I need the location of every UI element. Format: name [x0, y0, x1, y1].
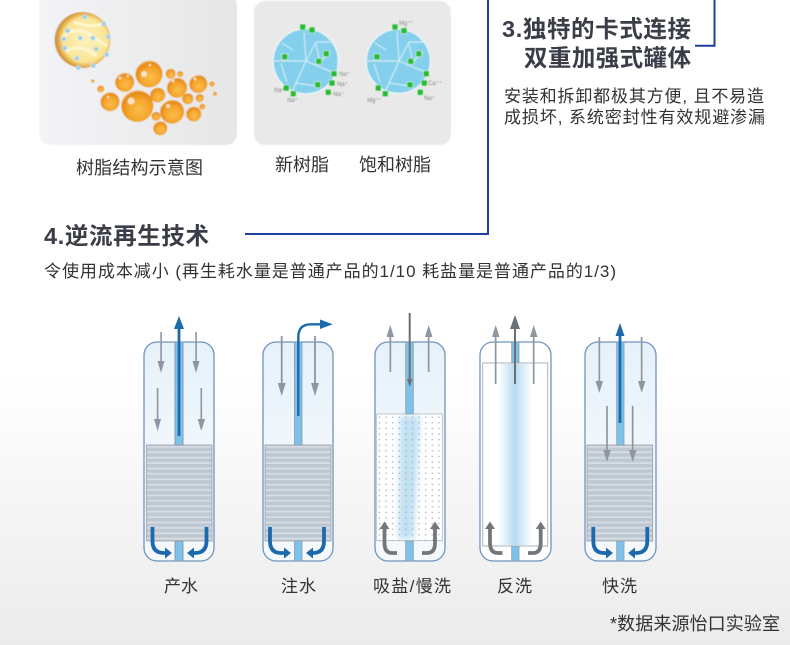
ion labels: Na⁺ [287, 97, 298, 104]
arrows: grey downflow [154, 332, 205, 431]
resin bed [146, 445, 212, 541]
ion labels [274, 71, 350, 104]
ion labels: Na⁺ [337, 81, 348, 88]
connector line: section 3 heading [695, 0, 714, 46]
resin bed [265, 445, 331, 541]
ion labels: Na⁺ [424, 95, 435, 102]
connector line: to section 4 [245, 0, 488, 234]
ion labels: Ca⁺⁺ [428, 80, 442, 87]
text block: section 3 description: 成损坏, 系统密封性有效规避渗漏 [504, 108, 765, 127]
heading: section 3: 3.独特的卡式连接 [502, 16, 691, 42]
text block: section 4 description: 令使用成本减小 (再生耗水量是普通产品的1/10 耗盐量是普通产品的1/3) [44, 261, 616, 281]
caption: new resin: 新树脂 [275, 155, 329, 175]
diagram: fast rinse tank [585, 323, 656, 561]
footnote: data source: *数据来源怡口实验室 [610, 614, 780, 634]
arrows: grey outflow [386, 325, 432, 372]
panel: resin structure image [39, 0, 237, 145]
resin bed [587, 445, 653, 541]
center tube [294, 342, 302, 561]
diagram: backwash tank [480, 315, 551, 561]
text block: section 3 description [504, 87, 765, 127]
new resin circle [273, 24, 350, 104]
saturated resin circle [366, 20, 442, 104]
label: refill: 注水 [281, 577, 316, 596]
orange resin beads [91, 60, 217, 135]
diagram: service tank [144, 316, 214, 561]
ion labels: Na⁺ [339, 71, 350, 78]
ion labels: Mg⁺⁺ [399, 20, 414, 27]
label: brine draw: 吸盐/慢洗 [373, 576, 451, 596]
arrows: grey downflow [596, 337, 646, 462]
text block: section 3 description: 安装和拆卸都极其方便, 且不易造 [504, 87, 764, 106]
heading: section 3: 双重加强式罐体 [524, 45, 692, 71]
bead highlights [107, 64, 196, 108]
ion labels [367, 20, 442, 104]
arrows: grey outflow [492, 325, 538, 384]
arrow: rinse water up [616, 323, 624, 423]
magnified resin bead [54, 12, 111, 70]
label: fast rinse: 快洗 [602, 577, 637, 596]
ion labels: Na⁺ [274, 87, 285, 94]
arrow: product water up [174, 316, 184, 436]
center tube [175, 342, 183, 561]
heading: section 4: 4.逆流再生技术 [44, 222, 209, 249]
ion sites [282, 24, 337, 97]
blue glow [398, 416, 420, 539]
panel: new and saturated resin image [254, 1, 451, 145]
arrows: grey downflow [278, 336, 319, 396]
heading: section 3 [502, 16, 692, 71]
caption: saturated resin: 饱和树脂 [359, 155, 431, 175]
center tube [512, 342, 519, 561]
ion sites [374, 24, 429, 97]
caption: resin structure: 树脂结构示意图 [76, 158, 203, 178]
arrow: brine in [409, 313, 411, 383]
label: backwash: 反洗 [497, 577, 532, 596]
ion labels: Na⁺ [333, 91, 344, 98]
label: service: 产水 [164, 577, 198, 596]
diagram: brine refill tank [263, 320, 333, 561]
arrow: water out to the right [298, 324, 322, 416]
blue glow [498, 364, 532, 545]
dotted bed [377, 414, 442, 541]
arrows: bottom upflow [490, 528, 541, 553]
arrows: bottom upflow [384, 528, 435, 553]
center tube [617, 342, 624, 561]
arrows: bottom collection [270, 527, 324, 553]
diagram: brine draw tank [375, 313, 445, 561]
ion labels: Mg⁺⁺ [367, 97, 382, 104]
expanded bed [483, 363, 548, 546]
arrow: center drain [514, 326, 516, 384]
center tube [406, 342, 413, 561]
arrows: bottom collection [152, 527, 206, 553]
arrows: bottom collection [593, 527, 647, 553]
